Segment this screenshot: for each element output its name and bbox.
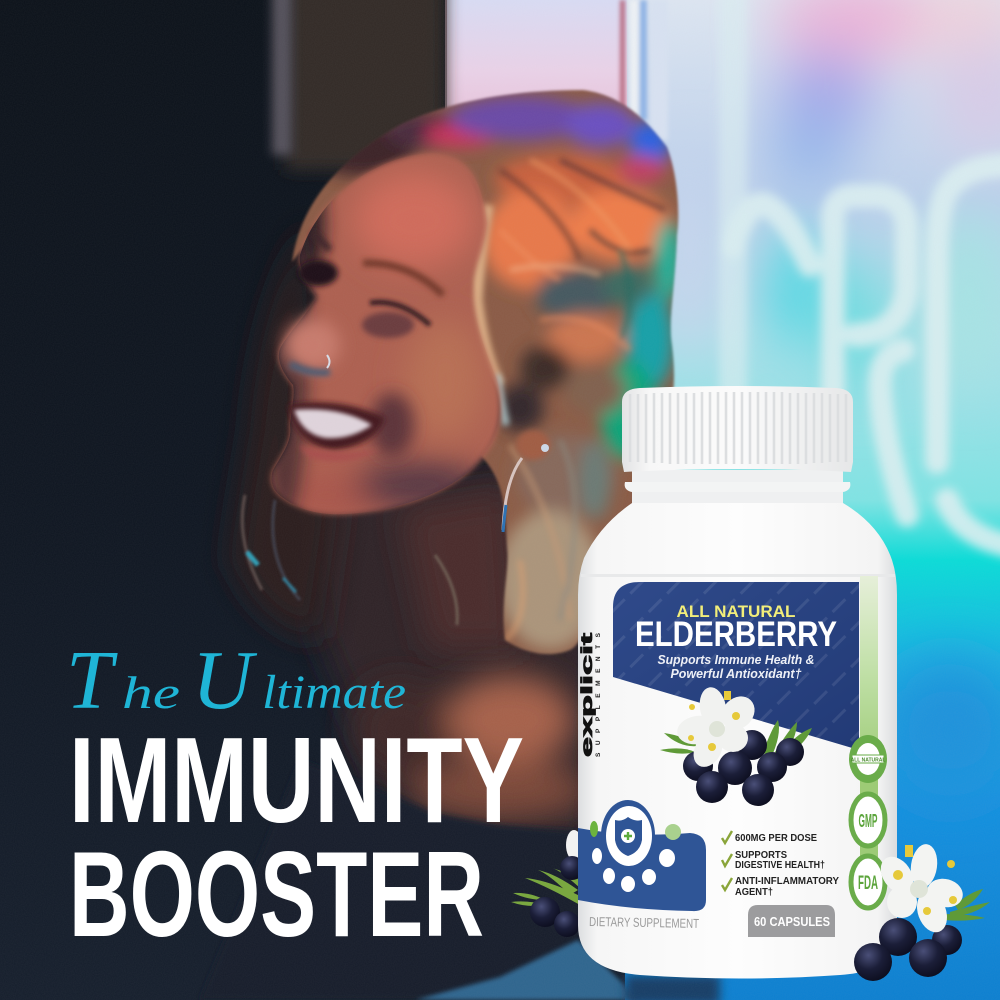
benefits list: SUPPORTS: [735, 849, 787, 861]
badge: GMP: GMP: [858, 811, 878, 831]
dark top and jacket: [200, 760, 720, 1000]
product bottle: [578, 386, 897, 978]
badge: FDA: [851, 856, 885, 908]
hair behind the face: [230, 220, 457, 640]
dark door frame: [285, 0, 445, 170]
headline: [66, 634, 524, 962]
benefits list: [722, 831, 839, 898]
shield icon: [615, 817, 642, 856]
IMMUNITY: IMMUNITY: [69, 712, 524, 848]
label top edge: [581, 574, 895, 577]
hair strands: [500, 160, 665, 640]
green stripe: [860, 576, 878, 776]
ear and earring: [503, 430, 550, 532]
product title: Powerful Antioxidant†: [670, 667, 802, 681]
benefits list: DIGESTIVE HEALTH†: [735, 859, 825, 871]
benefits list: ANTI-INFLAMMATORY: [735, 875, 839, 887]
bottle neck: [625, 470, 850, 510]
blonde wave near the face: [476, 205, 498, 385]
benefits list: 600MG PER DOSE: [735, 832, 817, 844]
BOOSTER: BOOSTER: [69, 826, 484, 962]
capsule count box: 60 CAPSULES: [754, 914, 830, 929]
brand logo: [579, 632, 602, 757]
product title: ALL NATURAL: [676, 602, 796, 621]
product title: ELDERBERRY: [635, 615, 837, 654]
badge: GMP: [851, 794, 885, 846]
script subtitle: he: [122, 667, 180, 718]
blue lower panel: [578, 800, 706, 911]
nose: [284, 319, 340, 373]
product title: [635, 602, 837, 681]
product title: Supports Immune Health &: [658, 653, 814, 667]
face: [261, 153, 501, 520]
blue header panel: [613, 582, 859, 750]
eyes and brows: [298, 232, 443, 338]
cheek crease shadow: [370, 393, 414, 457]
bottle body: [578, 503, 897, 978]
smile: [288, 402, 385, 461]
script subtitle: [66, 634, 406, 727]
nose ring: [327, 355, 330, 368]
script subtitle: ltimate: [262, 666, 406, 719]
neck and shoulder: [300, 460, 600, 840]
badge: all natural: ALL NATURAL: [851, 758, 885, 764]
dietary supplement label: DIETARY SUPPLEMENT: [589, 914, 699, 931]
berries and flower illustration: [660, 685, 812, 806]
benefits list: AGENT†: [735, 886, 773, 898]
window: [445, 0, 627, 130]
badge: all natural: [849, 735, 887, 783]
certification badges: [849, 735, 887, 908]
script subtitle: T: [66, 634, 118, 727]
badge: FDA: FDA: [858, 873, 878, 894]
brand logo: SUPPLEMENTS: [595, 632, 602, 757]
bottle cap: [622, 386, 853, 472]
neon sign letters: [733, 0, 1000, 546]
hair: [292, 90, 682, 654]
right neon wall: [625, 0, 1000, 1000]
left berries behind bottle: [511, 830, 584, 937]
woman: [230, 90, 682, 840]
capsule count box: [748, 905, 835, 937]
profile side shadow: [272, 240, 320, 508]
script subtitle: U: [192, 634, 258, 727]
right berries and flower: [854, 842, 990, 981]
brand logo: explicit: [579, 632, 596, 757]
